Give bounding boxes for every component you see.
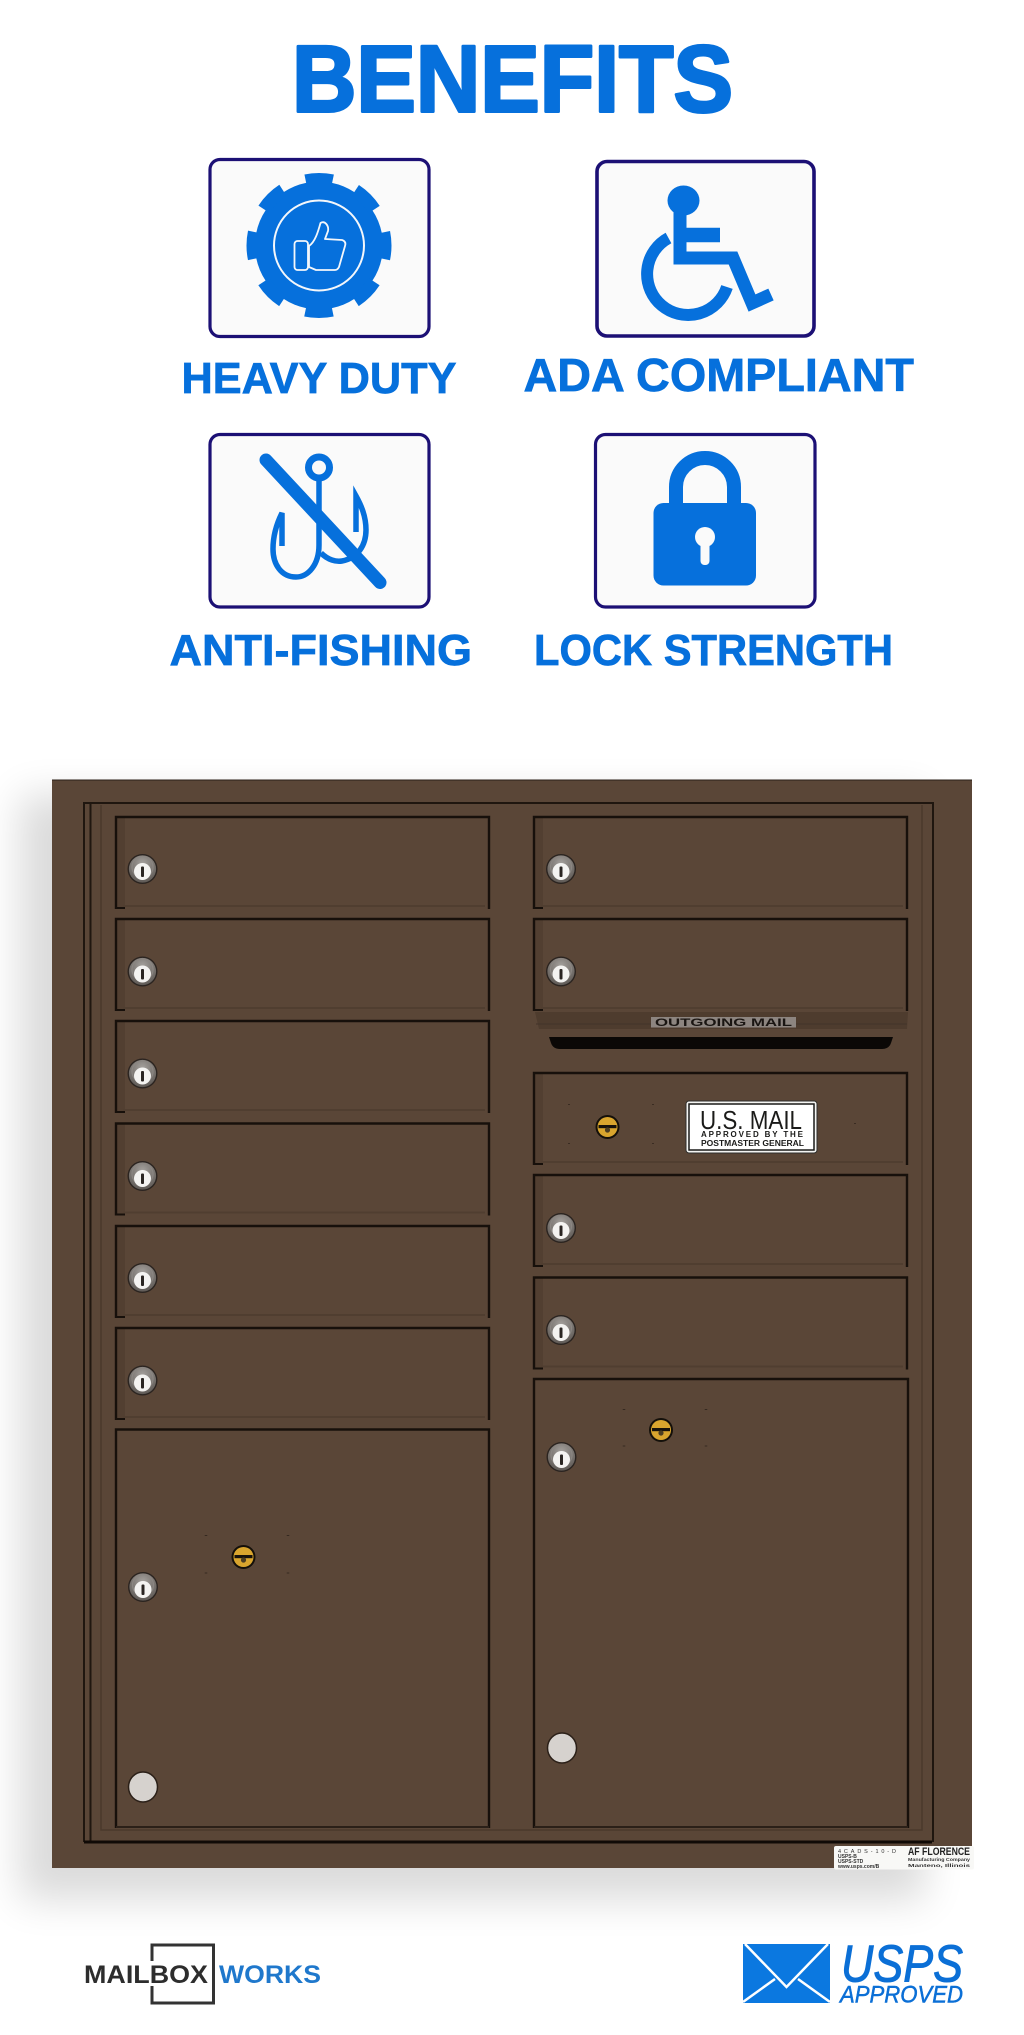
door R2 xyxy=(533,918,908,1011)
manufacturer label: USPS-B xyxy=(838,1854,857,1860)
wordmark: approved: APPROVED xyxy=(838,1982,963,2008)
parcel door right xyxy=(534,1379,908,1828)
white knob right xyxy=(548,1733,576,1763)
label: ada compliant: ADA COMPLIANT xyxy=(524,349,914,401)
lock L1 xyxy=(128,854,158,884)
manufacturer label: AF FLORENCE xyxy=(908,1846,970,1858)
door L6 xyxy=(115,1327,490,1420)
outgoing mail slot xyxy=(549,1037,893,1049)
icon box: heavy duty xyxy=(210,160,429,336)
logo: mailbox works xyxy=(84,1945,321,2003)
door R1 xyxy=(533,816,908,909)
label: lock strength: LOCK STRENGTH xyxy=(534,626,893,675)
door L2 xyxy=(115,918,490,1011)
parcel door left xyxy=(116,1430,489,1828)
white knob left xyxy=(128,1772,158,1802)
door L3 xyxy=(115,1020,490,1113)
manufacturer label: USPS-STD xyxy=(838,1859,864,1865)
us mail plate: APPROVED BY THE xyxy=(701,1130,804,1139)
gold lock on collection door xyxy=(569,1104,855,1144)
lock parcel right xyxy=(546,1442,576,1472)
wordmark: usps: USPS xyxy=(841,1936,963,1994)
outgoing mail plate: OUTGOING MAIL xyxy=(655,1017,792,1029)
logo square xyxy=(152,1945,214,2003)
lock R1 xyxy=(546,854,576,884)
outgoing mail plate xyxy=(651,1017,796,1029)
gold master lock right xyxy=(624,1409,706,1446)
us mail plate xyxy=(686,1101,817,1153)
label: heavy duty: HEAVY DUTY xyxy=(182,354,456,403)
icon: wheelchair xyxy=(647,186,771,315)
gold master lock left xyxy=(206,1535,288,1574)
lock L3 xyxy=(128,1058,158,1088)
panel: lock strength xyxy=(534,434,893,675)
icon box: lock strength xyxy=(596,434,815,607)
us mail plate: U.S. MAIL xyxy=(700,1105,802,1135)
door L4 xyxy=(115,1122,490,1216)
manufacturer label: Manteno, Illinois xyxy=(908,1863,971,1868)
panel: heavy duty xyxy=(182,160,456,403)
wordmark: mailbox: MAILBOX xyxy=(84,1961,208,1989)
label: anti-fishing: ANTI-FISHING xyxy=(170,626,472,675)
door L1 xyxy=(115,816,490,909)
panel: ada compliant xyxy=(524,162,914,401)
icon box: anti-fishing xyxy=(210,434,429,607)
lock parcel left xyxy=(128,1572,158,1602)
icon: padlock xyxy=(654,458,756,586)
manufacturer label: www.usps.com/B xyxy=(837,1864,880,1870)
door R3 xyxy=(533,1072,908,1165)
door L5 xyxy=(115,1225,490,1318)
right column: key locks xyxy=(546,854,576,1472)
panel: anti-fishing xyxy=(170,434,472,675)
manufacturer label: 4CADS-10-D xyxy=(838,1849,896,1855)
icon box: ada compliant xyxy=(597,162,814,336)
lock L5 xyxy=(128,1263,158,1293)
outgoing mail flap xyxy=(535,1012,908,1029)
mailbox frame xyxy=(52,780,972,1868)
lock L6 xyxy=(128,1366,158,1396)
icon: envelope xyxy=(743,1944,830,2003)
right column: compartment doors xyxy=(533,816,908,1828)
left column: key locks xyxy=(128,854,158,1602)
lock L4 xyxy=(128,1161,158,1191)
mailbox shadow xyxy=(20,795,925,1900)
lock R2 xyxy=(546,956,576,986)
door R4 xyxy=(533,1174,908,1267)
icon: crossed fishing hook xyxy=(266,457,380,582)
left column: compartment doors xyxy=(115,816,490,1828)
manufacturer label: Manufacturing Company xyxy=(908,1857,971,1862)
logo: usps approved xyxy=(743,1936,963,2008)
door R5 xyxy=(533,1276,908,1370)
title: BENEFITS xyxy=(292,26,733,132)
lock R4 xyxy=(546,1213,576,1243)
mailbox unit xyxy=(52,780,974,1870)
wordmark: works: WORKS xyxy=(219,1961,321,1989)
manufacturer label xyxy=(834,1846,974,1870)
icon: gear with thumbs up xyxy=(253,180,385,312)
us mail plate: POSTMASTER GENERAL xyxy=(701,1139,804,1148)
lock L2 xyxy=(128,956,158,986)
lock R5 xyxy=(546,1315,576,1345)
